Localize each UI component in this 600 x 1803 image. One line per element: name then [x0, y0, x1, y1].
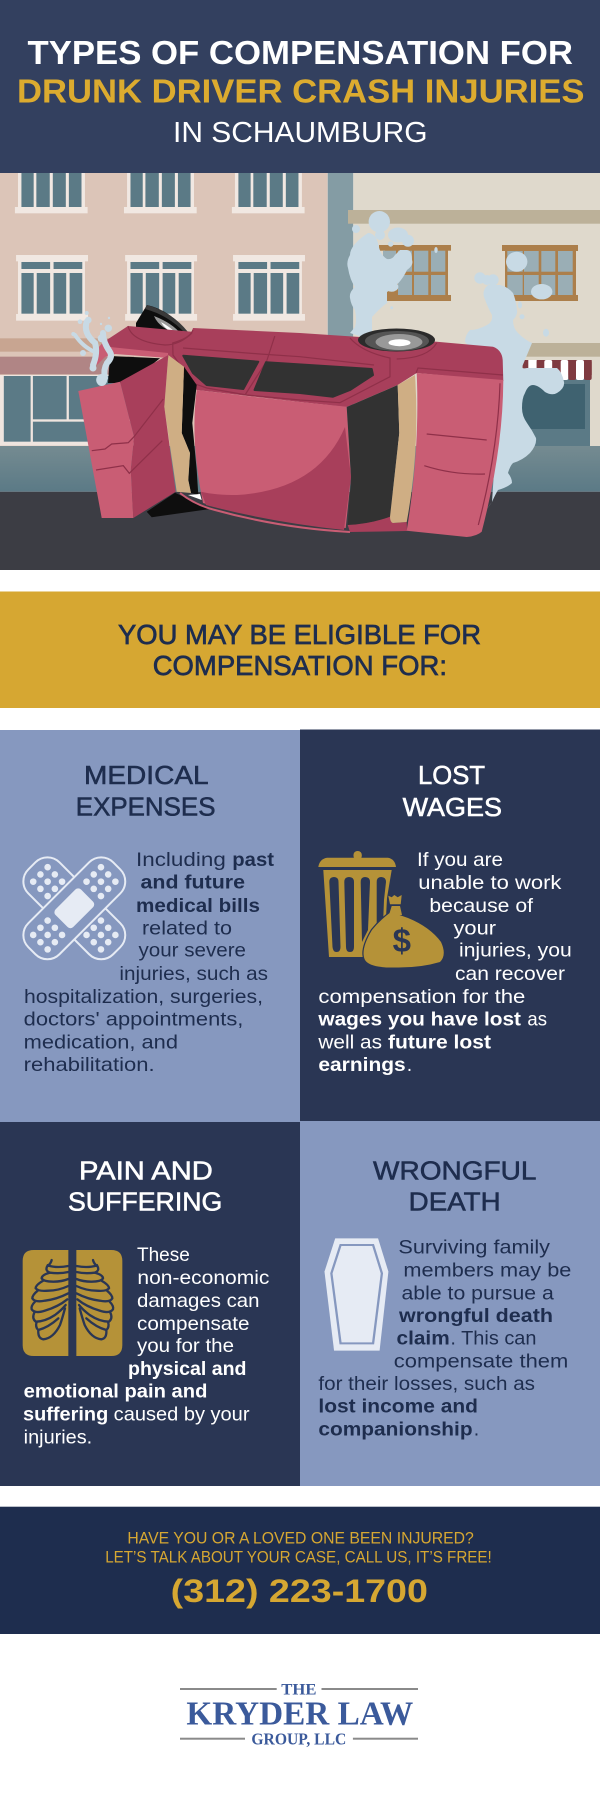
body text: wrongful death: . This can: [450, 1327, 536, 1349]
right building: [328, 173, 600, 446]
body text: medical expenses: hospitalization, surgeries,: [24, 986, 263, 1008]
heading: wrongful death: [373, 1157, 536, 1216]
eligibility banner: [0, 592, 600, 708]
body text: lost wages: earnings: [318, 1054, 406, 1076]
sidewalk and road: [0, 446, 600, 570]
heading: pain and suffering: PAIN AND: [79, 1157, 213, 1185]
heading: wrongful death: WRONGFUL: [373, 1157, 536, 1185]
body text: pain and suffering: caused by your: [114, 1404, 250, 1426]
smoke clouds: [347, 211, 564, 510]
body text: wrongful death: lost income and: [318, 1396, 478, 1418]
body text: wrongful death: wrongful death: [398, 1305, 553, 1327]
icon: trash can and money bag: [318, 851, 444, 968]
illustration: overturned car on city street: [0, 173, 600, 570]
wheel: rear: [358, 328, 435, 352]
heading: lost wages: [403, 762, 502, 822]
icon: ribcage: [23, 1250, 122, 1356]
body text: lost wages: wages you have lost: [317, 1009, 522, 1031]
body text: medical expenses: medication, and: [24, 1032, 178, 1054]
heading: medical expenses: MEDICAL: [84, 762, 209, 790]
crumpled front panel: [120, 355, 176, 518]
subtitle: IN SCHAUMBURG: [173, 117, 428, 149]
heading: pain and suffering: [68, 1157, 222, 1216]
body text: lost wages: as: [527, 1009, 547, 1031]
call to action text: HAVE YOU OR A LOVED ONE BEEN INJURED?: [127, 1529, 474, 1547]
car rear panel: [407, 373, 503, 537]
body text: lost wages: injuries, you: [459, 940, 572, 962]
heading: medical expenses: [76, 762, 216, 822]
body text: medical expenses: doctors' appointments,: [24, 1009, 243, 1031]
body text: medical expenses: rehabilitation.: [24, 1054, 155, 1076]
heading: lost wages: WAGES: [403, 794, 502, 822]
call to action band: [0, 1507, 600, 1634]
body text: pain and suffering: damages can: [137, 1290, 260, 1312]
body text: pain and suffering: you for the: [137, 1335, 234, 1357]
panel: lost wages: [300, 730, 600, 1121]
body text: medical expenses: [24, 849, 275, 1076]
body text: pain and suffering: compensate: [137, 1313, 250, 1335]
striped awning: [523, 360, 592, 380]
body text: pain and suffering: emotional pain and: [24, 1381, 207, 1403]
call to action text: LET’S TALK ABOUT YOUR CASE, CALL US, IT’S FREE!: [105, 1548, 492, 1566]
body text: pain and suffering: physical and: [128, 1358, 246, 1380]
body text: wrongful death: claim: [396, 1327, 450, 1349]
title line 2: DRUNK DRIVER CRASH INJURIES: [17, 74, 584, 111]
logo: the kryder law group: GROUP, LLC: [251, 1729, 346, 1748]
body text: medical expenses: and future: [140, 872, 245, 894]
heading: wrongful death: DEATH: [409, 1188, 501, 1216]
body text: wrongful death: able to pursue a: [402, 1282, 554, 1304]
panel: pain and suffering: [0, 1122, 300, 1486]
body text: pain and suffering: injuries.: [24, 1427, 92, 1449]
overturned red car: [78, 305, 503, 537]
body text: medical expenses: Including: [136, 849, 226, 871]
wheel: front: [132, 305, 188, 345]
heading: pain and suffering: SUFFERING: [68, 1188, 222, 1216]
body text: wrongful death: companionship: [318, 1419, 473, 1441]
body text: pain and suffering: non-economic: [137, 1267, 270, 1289]
body text: medical expenses: past: [232, 849, 275, 871]
title line 1: TYPES OF COMPENSATION FOR: [28, 35, 573, 72]
body text: pain and suffering: These: [137, 1244, 190, 1266]
body text: lost wages: compensation for the: [318, 986, 525, 1008]
heading: lost wages: LOST: [418, 762, 485, 790]
logo: the kryder law group: THE: [281, 1682, 316, 1699]
body text: wrongful death: [318, 1236, 571, 1441]
icon: crossed bandages: [16, 850, 132, 966]
body text: wrongful death: .: [474, 1419, 479, 1441]
body text: lost wages: .: [407, 1054, 412, 1076]
title header: [0, 0, 600, 173]
body text: lost wages: future lost: [388, 1032, 492, 1054]
body text: pain and suffering: suffering: [23, 1404, 108, 1426]
call to action text: [105, 1529, 492, 1566]
body text: lost wages: well as: [317, 1032, 382, 1054]
body text: lost wages: because of: [429, 895, 534, 917]
car hood: [194, 390, 351, 528]
body text: medical expenses: your severe: [138, 940, 246, 962]
car underside and pillars: [182, 367, 198, 495]
left building: [0, 173, 328, 450]
panel: wrongful death: [300, 1121, 600, 1486]
body text: pain and suffering: [23, 1244, 270, 1449]
phone number: (312) 223-1700: [171, 1573, 428, 1609]
body text: wrongful death: members may be: [403, 1259, 571, 1281]
body text: wrongful death: for their losses, such as: [318, 1373, 535, 1395]
body text: lost wages: [317, 849, 572, 1076]
body text: lost wages: If you are: [417, 849, 503, 871]
body text: lost wages: unable to work: [418, 872, 562, 894]
body text: wrongful death: Surviving family: [398, 1236, 550, 1258]
logo: the kryder law group: [180, 1682, 418, 1748]
body text: medical expenses: injuries, such as: [119, 963, 268, 985]
small splash at car front: [71, 311, 112, 386]
banner text line 2: COMPENSATION FOR:: [153, 650, 447, 681]
icon glyph: dollar sign: $: [393, 922, 411, 959]
panel: medical expenses: [0, 730, 300, 1122]
car roof and window band: [107, 326, 503, 407]
body text: wrongful death: compensate them: [394, 1350, 568, 1372]
icon: coffin: [324, 1238, 388, 1351]
logo: the kryder law group: KRYDER LAW: [186, 1696, 413, 1733]
banner text line 1: YOU MAY BE ELIGIBLE FOR: [118, 619, 481, 650]
body text: lost wages: can recover: [455, 963, 566, 985]
body text: medical expenses: related to: [142, 918, 232, 940]
body text: lost wages: your: [454, 918, 497, 940]
body text: medical expenses: medical bills: [136, 895, 260, 917]
heading: medical expenses: EXPENSES: [76, 794, 216, 822]
